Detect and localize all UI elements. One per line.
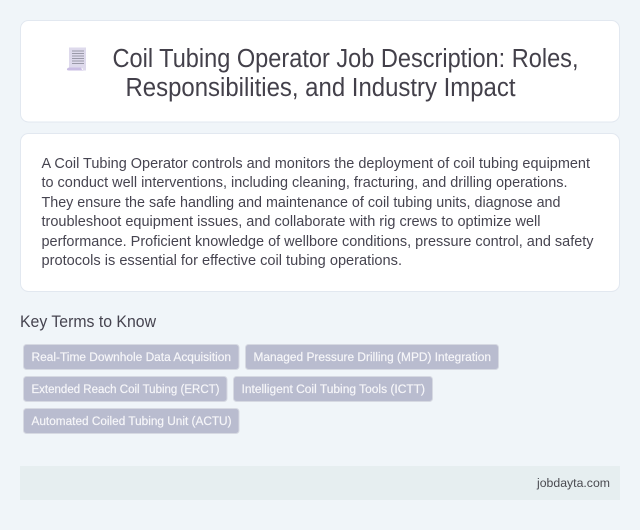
text block: description: protocols is essential for effective coil tubing operations. xyxy=(42,253,402,269)
footer bar xyxy=(20,466,620,500)
title: Responsibilities, and Industry Impact xyxy=(126,74,516,102)
chip: real-time data xyxy=(24,344,239,370)
chip: real-time data: Real-Time Downhole Data Acquisition xyxy=(32,350,231,364)
text block: description xyxy=(42,156,594,269)
text block: description: to conduct well interventions, including cleaning, fracturing, and drilling operations. xyxy=(42,175,568,191)
heading: key terms: Key Terms to Know xyxy=(20,313,156,331)
panel: description xyxy=(20,134,620,292)
chip: ICTT: Intelligent Coil Tubing Tools (ICTT) xyxy=(242,382,425,396)
chip: ERCT xyxy=(24,376,227,402)
title: Coil Tubing Operator Job Description: Roles, xyxy=(112,45,578,73)
title xyxy=(112,45,578,102)
text block: description: They ensure the safe handling and maintenance of coil tubing units, diagnose and xyxy=(42,195,560,211)
key term chips xyxy=(24,344,498,434)
footer text: jobdayta.com xyxy=(536,476,610,490)
chip: ICTT xyxy=(234,376,432,402)
text block: description: troubleshoot equipment issues, and collaborate with rig crews to optimize well xyxy=(42,214,540,230)
text block: description: A Coil Tubing Operator controls and monitors the deployment of coil tubing equipment xyxy=(42,156,590,172)
text block: description: performance. Proficient knowledge of wellbore conditions, pressure control, and safety xyxy=(42,234,594,250)
chip: ACTU: Automated Coiled Tubing Unit (ACTU) xyxy=(32,414,232,428)
chip: MPD xyxy=(246,344,498,370)
icon: document scroll xyxy=(67,48,86,70)
panel: title card xyxy=(20,20,620,122)
chip: ACTU xyxy=(24,408,239,434)
chip: ERCT: Extended Reach Coil Tubing (ERCT) xyxy=(32,382,220,396)
chip: MPD: Managed Pressure Drilling (MPD) Integration xyxy=(254,350,491,364)
